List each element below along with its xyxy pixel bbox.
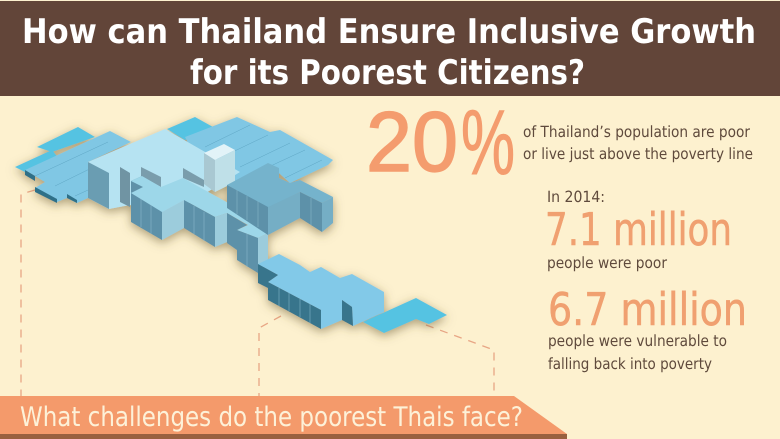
20% statistic: % xyxy=(461,92,515,194)
poverty description: of Thailand’s population are poor xyxy=(523,123,751,141)
west wing xyxy=(25,131,131,203)
title: for its Poorest Citizens? xyxy=(190,53,585,93)
header banner xyxy=(0,1,780,96)
7.1 million statistic: 7.1 million xyxy=(545,203,732,256)
bottom banner xyxy=(0,396,567,439)
western cyan tip xyxy=(15,150,60,172)
northern cyan strip xyxy=(37,127,95,152)
2014 label: In 2014: xyxy=(547,188,605,206)
poverty description: or live just above the poverty line xyxy=(523,145,753,163)
central left faces xyxy=(88,162,109,209)
20% statistic: 20 xyxy=(366,95,458,190)
6.7 million statistic: 6.7 million xyxy=(548,283,747,336)
isometric map of Thailand xyxy=(15,117,447,333)
tower xyxy=(204,144,235,192)
central band xyxy=(131,176,268,273)
northeast cyan strip xyxy=(167,117,213,140)
eastern plateau xyxy=(227,163,333,235)
northeast plateau xyxy=(185,117,333,185)
20% statistic xyxy=(366,92,515,194)
title xyxy=(22,12,756,93)
vulnerable text: falling back into poverty xyxy=(548,355,712,373)
vulnerable text xyxy=(548,332,727,373)
central highland xyxy=(88,129,240,215)
vulnerable text: people were vulnerable to xyxy=(548,332,727,350)
poverty description xyxy=(523,123,753,163)
southern peninsula xyxy=(258,254,384,329)
banner question: What challenges do the poorest Thais face? xyxy=(20,402,523,433)
people poor text: people were poor xyxy=(547,254,668,272)
dashed connector lines xyxy=(21,190,494,396)
southern cyan tail xyxy=(363,298,447,333)
